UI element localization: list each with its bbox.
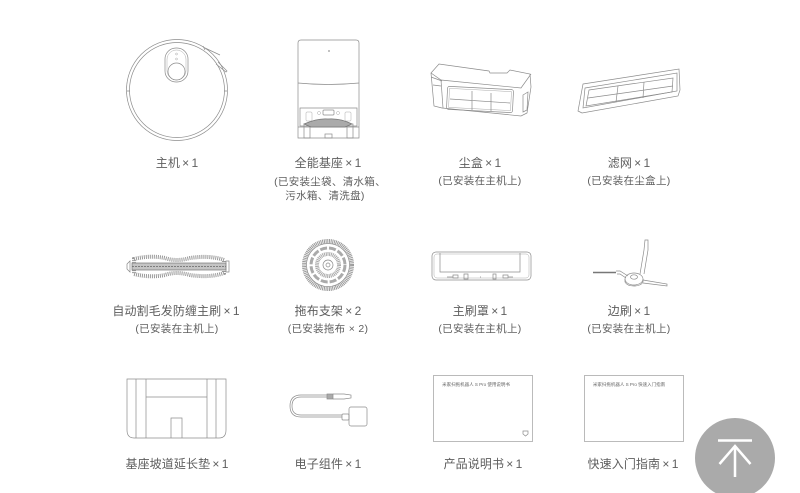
- note: main brush: (已安装在主机上): [135, 322, 219, 335]
- icon: mop holder: [304, 241, 352, 289]
- item: ramp extension pad: [125, 379, 229, 471]
- back to top button: [695, 418, 775, 493]
- icon detail: base station brush tray: [304, 119, 352, 127]
- label: quick start guide: 快速入门指南 × 1: [588, 456, 679, 471]
- icon: ramp extension pad: [127, 379, 226, 438]
- icon: filter: [578, 69, 680, 113]
- item: quick start guide: [584, 376, 684, 471]
- icon: base station: [298, 40, 359, 138]
- item: base station: [274, 40, 386, 202]
- icon: main brush: [127, 257, 229, 276]
- note: main brush cover: (已安装在主机上): [438, 322, 522, 335]
- note: side brush: (已安装在主机上): [587, 322, 671, 335]
- label: mop holder: 拖布支架 × 2: [295, 304, 362, 318]
- icon: dust box: [431, 64, 531, 116]
- label: dust box: 尘盒 × 1: [459, 155, 501, 170]
- label: ramp extension pad: 基座坡道延长垫 × 1: [125, 456, 229, 471]
- label: base station: 全能基座 × 1: [295, 155, 362, 170]
- note: base station contents: [274, 175, 386, 202]
- note: filter: (已安装在尘盒上): [587, 174, 671, 187]
- icon: manual booklet: 米家扫拖机器人 S Pro 使用说明书: [442, 381, 510, 388]
- icon: side brush: [593, 240, 667, 286]
- item: main brush: [112, 257, 240, 335]
- icon: robot vacuum: [126, 40, 228, 140]
- label: filter: 滤网 × 1: [608, 156, 650, 170]
- label: side brush: 边刷 × 1: [608, 304, 650, 318]
- item: mop holder: [288, 241, 368, 335]
- note: dust box: (已安装在主机上): [438, 174, 522, 187]
- item: dust box: [431, 64, 531, 187]
- icon: power cable: [290, 394, 367, 426]
- label: main brush: 自动割毛发防缠主刷 × 1: [112, 303, 240, 318]
- icon: up arrow: [718, 440, 752, 477]
- note: mop holder: (已安装拖布 × 2): [288, 322, 368, 335]
- label: main brush cover: 主刷罩 × 1: [453, 304, 508, 318]
- item: electronic assembly: [290, 394, 367, 471]
- label: product manual: 产品说明书 × 1: [444, 456, 523, 471]
- icon: main brush cover: [432, 252, 531, 280]
- icon: guide booklet: 米家扫拖机器人 S Pro 快速入门指南: [593, 381, 666, 388]
- label: main robot: 主机 × 1: [156, 156, 198, 170]
- note: base station contents: (已安装尘袋、清水箱、: [274, 175, 386, 188]
- item: filter: [578, 69, 680, 187]
- label: electronic assembly: 电子组件 × 1: [295, 457, 362, 471]
- item: main brush cover: [432, 252, 531, 335]
- item: main robot: [126, 40, 228, 170]
- item: product manual: [434, 376, 532, 471]
- note: base station contents: 污水箱、清洗盘): [285, 189, 365, 202]
- item: side brush: [587, 240, 671, 335]
